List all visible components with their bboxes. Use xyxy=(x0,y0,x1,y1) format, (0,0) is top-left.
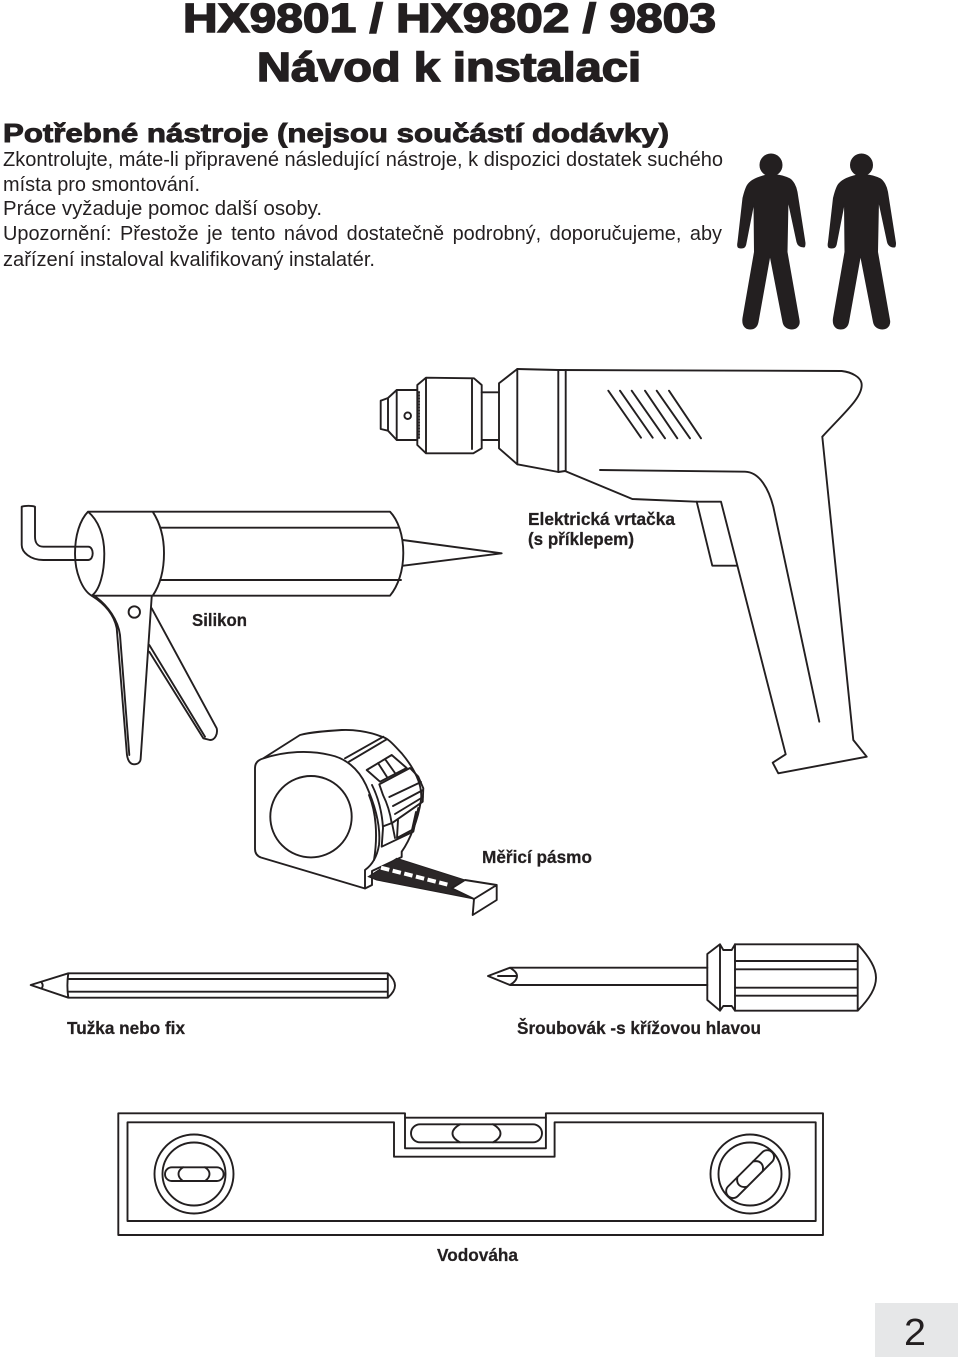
tape blade xyxy=(368,858,474,899)
tape housing xyxy=(255,730,421,888)
tool: pencil xyxy=(31,973,395,998)
tape lock xyxy=(367,755,407,782)
gun rod xyxy=(22,506,93,560)
icon: person left xyxy=(738,154,805,329)
label: drill: Elektrická vrtačka xyxy=(528,509,675,529)
level right vial xyxy=(710,1134,790,1214)
tool: measuring tape xyxy=(255,730,497,915)
icon: person right xyxy=(828,154,896,329)
screwdriver shaft xyxy=(488,968,707,985)
intro text block: Práce vyžaduje pomoc další osoby. xyxy=(3,198,322,220)
level top vial xyxy=(411,1124,542,1142)
gun nozzle xyxy=(403,540,502,566)
tool: screwdriver xyxy=(488,944,876,1011)
title xyxy=(183,0,716,90)
tool: electric hammer drill xyxy=(381,369,867,773)
label: screwdriver: Šroubovák -s křížovou hlavou xyxy=(517,1017,761,1038)
label: measuring tape: Měřicí pásmo xyxy=(482,847,592,867)
gun barrel xyxy=(75,512,403,596)
gun handle xyxy=(92,596,152,764)
heading: required tools: Potřebné nástroje (nejsou součástí dodávky) xyxy=(3,118,669,148)
icon: two people xyxy=(738,154,896,329)
tool: silicone gun xyxy=(22,506,502,764)
intro text block xyxy=(3,149,723,271)
label: spirit level: Vodováha xyxy=(437,1245,518,1265)
label: drill xyxy=(528,509,675,549)
label: drill: (s příklepem) xyxy=(528,529,634,549)
level left vial xyxy=(154,1134,234,1214)
page number xyxy=(875,1303,958,1357)
intro text block: Zkontrolujte, máte-li připravené následující nástroje, k dispozici dostatek suchého xyxy=(3,149,723,171)
tool: spirit level xyxy=(118,1113,823,1235)
gun lever xyxy=(149,608,217,740)
title: Návod k instalaci xyxy=(257,44,641,90)
tape top band xyxy=(345,737,387,762)
tape lower guard xyxy=(369,785,418,860)
tape slider xyxy=(379,768,423,823)
drill trigger xyxy=(697,502,737,566)
page number: 2 xyxy=(904,1312,926,1354)
drill chuck xyxy=(381,369,517,464)
intro text block: zařízení instaloval kvalifikovaný instalatér. xyxy=(3,249,375,271)
label: pencil: Tužka nebo fix xyxy=(67,1018,185,1038)
intro text block: místa pro smontování. xyxy=(3,174,200,196)
label: silicone: Silikon xyxy=(192,610,247,630)
screwdriver collar xyxy=(707,944,735,1011)
level inner panel xyxy=(128,1122,816,1221)
drill vents xyxy=(608,391,701,438)
tape window circle xyxy=(270,776,352,857)
screwdriver handle xyxy=(735,944,876,1011)
drill body xyxy=(517,369,867,773)
drill grip line xyxy=(600,470,819,722)
tape end hook xyxy=(452,880,497,915)
drill collar band xyxy=(558,370,566,472)
level frame xyxy=(118,1113,823,1235)
intro text block: Upozornění: Přestože je tento návod dostatečně podrobný, doporučujeme, aby xyxy=(3,223,722,245)
level notch xyxy=(405,1118,546,1148)
